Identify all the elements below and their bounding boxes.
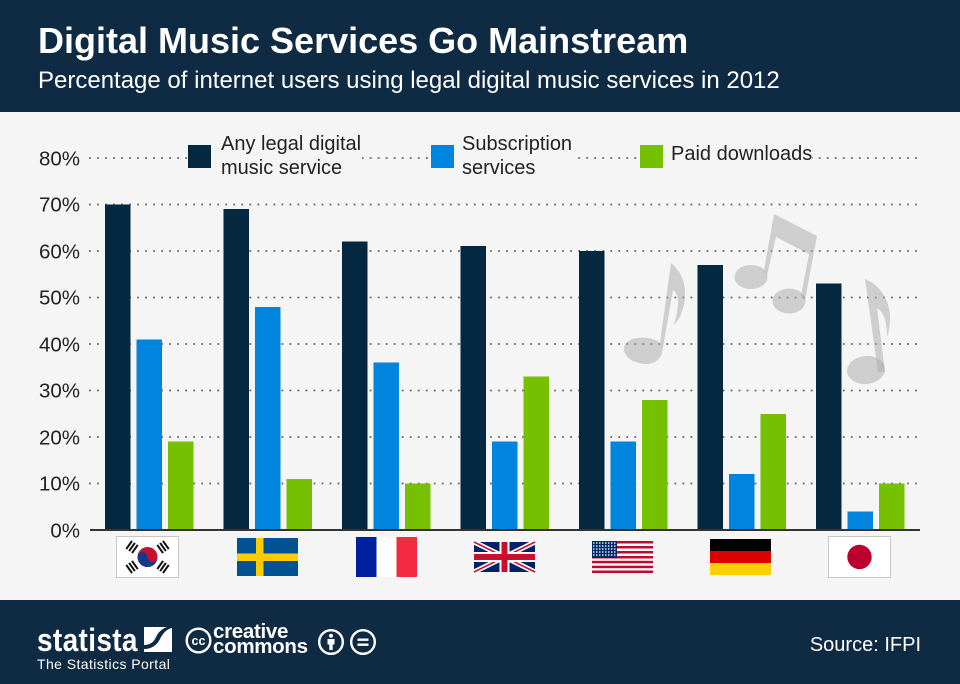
- flag: Germany: [710, 539, 771, 575]
- legend item: subscription services: services: [462, 157, 535, 179]
- tagline: The Statistics Portal: [37, 656, 170, 672]
- legend item: paid downloads: Paid downloads: [671, 143, 812, 165]
- legend item: subscription services: Subscription: [462, 133, 572, 155]
- flag: United Kingdom: [474, 542, 535, 572]
- flag: United States: [592, 541, 653, 573]
- flag: South Korea: [116, 536, 178, 578]
- icon: beamed notes: [734, 214, 817, 314]
- legend item: any legal digital music service: [188, 132, 362, 182]
- cc wordmark: [213, 620, 308, 658]
- y axis labels: 50%: [39, 286, 80, 310]
- y axis labels: 80%: [39, 148, 80, 170]
- footer band: [0, 600, 960, 684]
- bars: any legal digital music service: [105, 204, 842, 530]
- subtitle: Percentage of internet users using legal digital music services in 2012: [38, 67, 780, 94]
- y axis labels: 10%: [39, 472, 80, 496]
- x axis: [90, 529, 920, 531]
- legend item: paid downloads: [640, 140, 812, 170]
- source: Source: IFPI: [810, 634, 921, 656]
- y axis labels: 40%: [39, 334, 80, 356]
- statista logo: [37, 622, 172, 672]
- cc circle icon: cc: [192, 634, 205, 648]
- chart: [39, 133, 920, 578]
- y axis labels: 20%: [39, 426, 80, 450]
- cc wordmark: commons: [213, 635, 308, 658]
- no-derivatives icon: [350, 629, 376, 655]
- cc wordmark: creative: [213, 620, 288, 643]
- legend item: any legal digital music service: Any legal digital: [221, 133, 361, 155]
- attribution icon: [318, 629, 344, 655]
- wordmark: statista: [37, 622, 138, 658]
- flag: Sweden: [237, 538, 298, 576]
- y axis labels: [39, 148, 80, 542]
- icon: right eighth note: [846, 279, 890, 386]
- cc circle icon: [186, 628, 212, 654]
- legend item: any legal digital music service: music service: [221, 157, 342, 179]
- icon: left eighth note: [624, 263, 685, 364]
- header band: [0, 0, 960, 112]
- y axis labels: 30%: [39, 380, 80, 402]
- flag: France: [356, 537, 417, 577]
- bars: paid downloads: [168, 376, 904, 530]
- creative commons logo: [186, 620, 376, 658]
- logo mark: [144, 627, 172, 652]
- title: Digital Music Services Go Mainstream: [38, 20, 688, 61]
- y axis labels: 0%: [50, 520, 80, 542]
- bars: subscription services: [136, 307, 873, 530]
- flag: Japan: [828, 536, 890, 578]
- y axis labels: 60%: [39, 240, 80, 264]
- y axis labels: 70%: [39, 194, 80, 216]
- legend: [188, 132, 812, 182]
- legend item: subscription services: [431, 132, 572, 182]
- icon: music notes: [624, 214, 890, 386]
